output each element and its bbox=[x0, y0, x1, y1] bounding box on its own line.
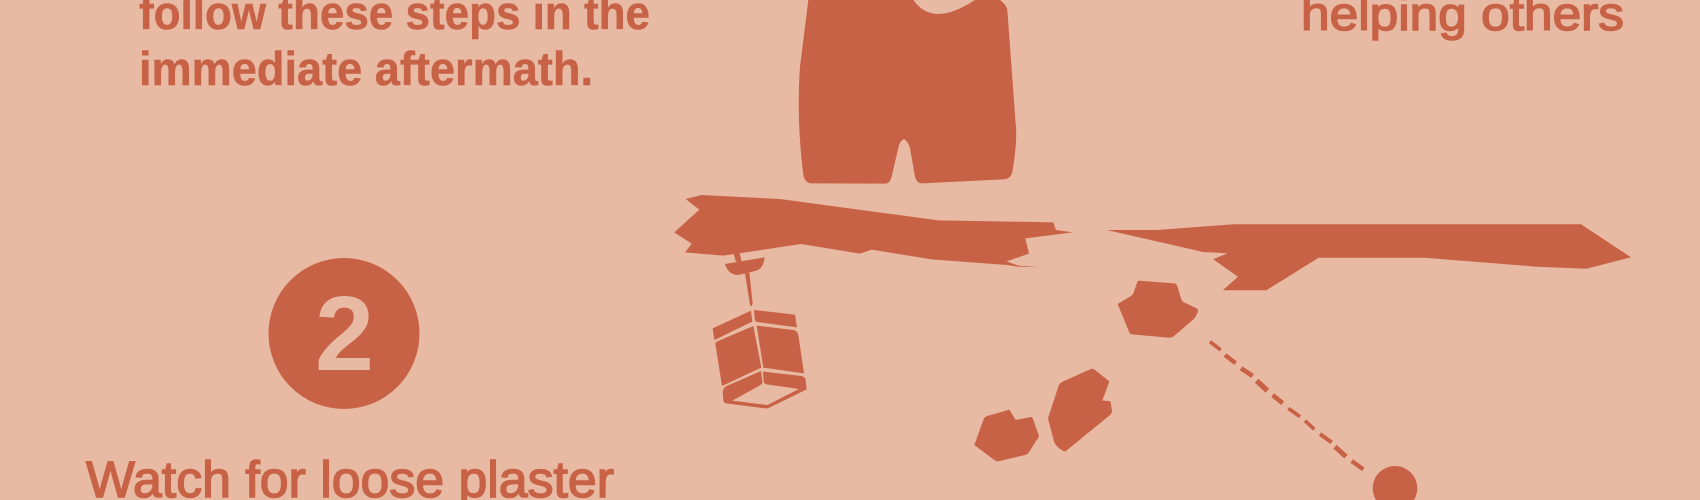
dashed trajectory line bbox=[1210, 342, 1363, 469]
debris rock 1 bbox=[1118, 281, 1198, 338]
intro text block bbox=[139, 0, 650, 95]
debris rock 3 bbox=[974, 410, 1039, 461]
debris rock 2 bbox=[1048, 369, 1112, 451]
icon: hanging lamp bbox=[713, 252, 807, 408]
falling debris and trajectory bbox=[974, 281, 1417, 500]
left broken ceiling beam bbox=[674, 195, 1073, 267]
intro text block: immediate aftermath. bbox=[139, 42, 593, 95]
step 2 number badge: 2 bbox=[315, 275, 374, 393]
icon: person lower body bbox=[799, 0, 1016, 184]
step 2 number badge bbox=[268, 258, 420, 409]
right broken ceiling beam bbox=[1107, 224, 1631, 290]
debris impact circle bbox=[1373, 466, 1417, 500]
